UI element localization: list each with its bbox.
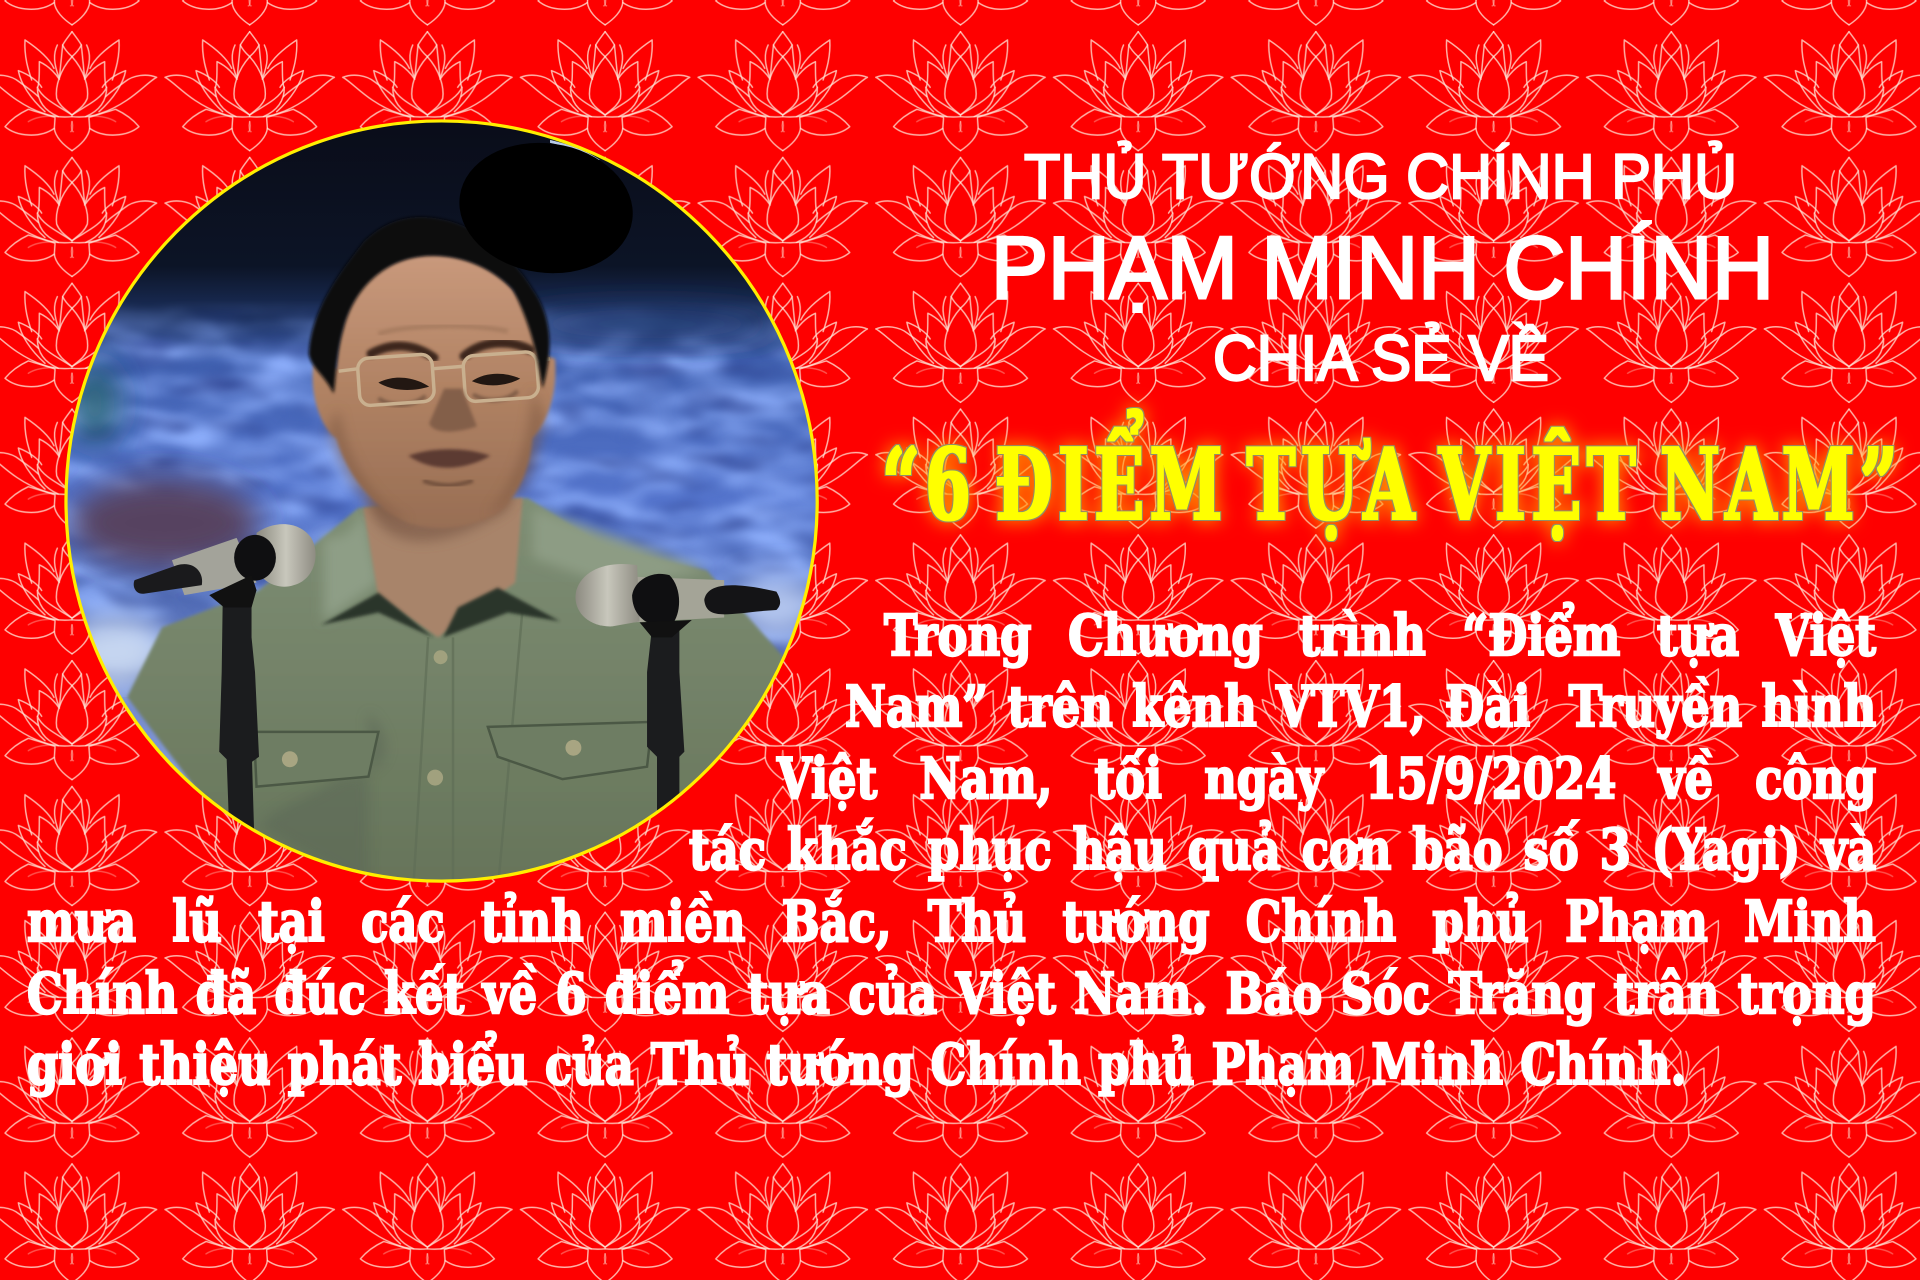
body paragraph: Trong Chương trình “Điểm tựa Việt — [884, 603, 1876, 669]
heading line: Phạm Minh Chính: PHẠM MINH CHÍNH — [991, 218, 1774, 317]
photo: black oval mark — [460, 143, 633, 274]
body paragraph: mưa lũ tại các tỉnh miền Bắc, Thủ tướng Chính phủ Phạm Minh — [27, 889, 1876, 955]
heading line: Thủ tướng Chính phủ: THỦ TƯỚNG CHÍNH PHỦ — [1024, 141, 1737, 212]
photo: right microphone and stand — [575, 564, 780, 814]
photo: neck and collar — [321, 488, 560, 637]
body paragraph: Việt Nam, tối ngày 15/9/2024 về công — [777, 746, 1876, 812]
body paragraph: giới thiệu phát biểu của Thủ tướng Chính phủ Phạm Minh Chính. — [27, 1032, 1686, 1098]
body paragraph: Chính đã đúc kết về 6 điểm tựa của Việt Nam. Báo Sóc Trăng trân trọng — [27, 961, 1876, 1027]
body paragraph: tác khắc phục hậu quả cơn bão số 3 (Yagi) và — [689, 817, 1876, 883]
photo: left microphone and stand — [134, 524, 316, 829]
body paragraph: Nam” trên kênh VTV1, Đài Truyền hình — [845, 674, 1876, 740]
photo: shirt — [127, 498, 784, 890]
yellow ring — [66, 121, 817, 881]
photo: studio backdrop — [68, 122, 816, 789]
photo: face — [313, 254, 555, 528]
photo: hair — [309, 217, 549, 394]
heading line: Chia sẻ về: CHIA SẺ VỀ — [1213, 321, 1549, 394]
portrait photo in yellow-ringed circle — [64, 119, 819, 883]
